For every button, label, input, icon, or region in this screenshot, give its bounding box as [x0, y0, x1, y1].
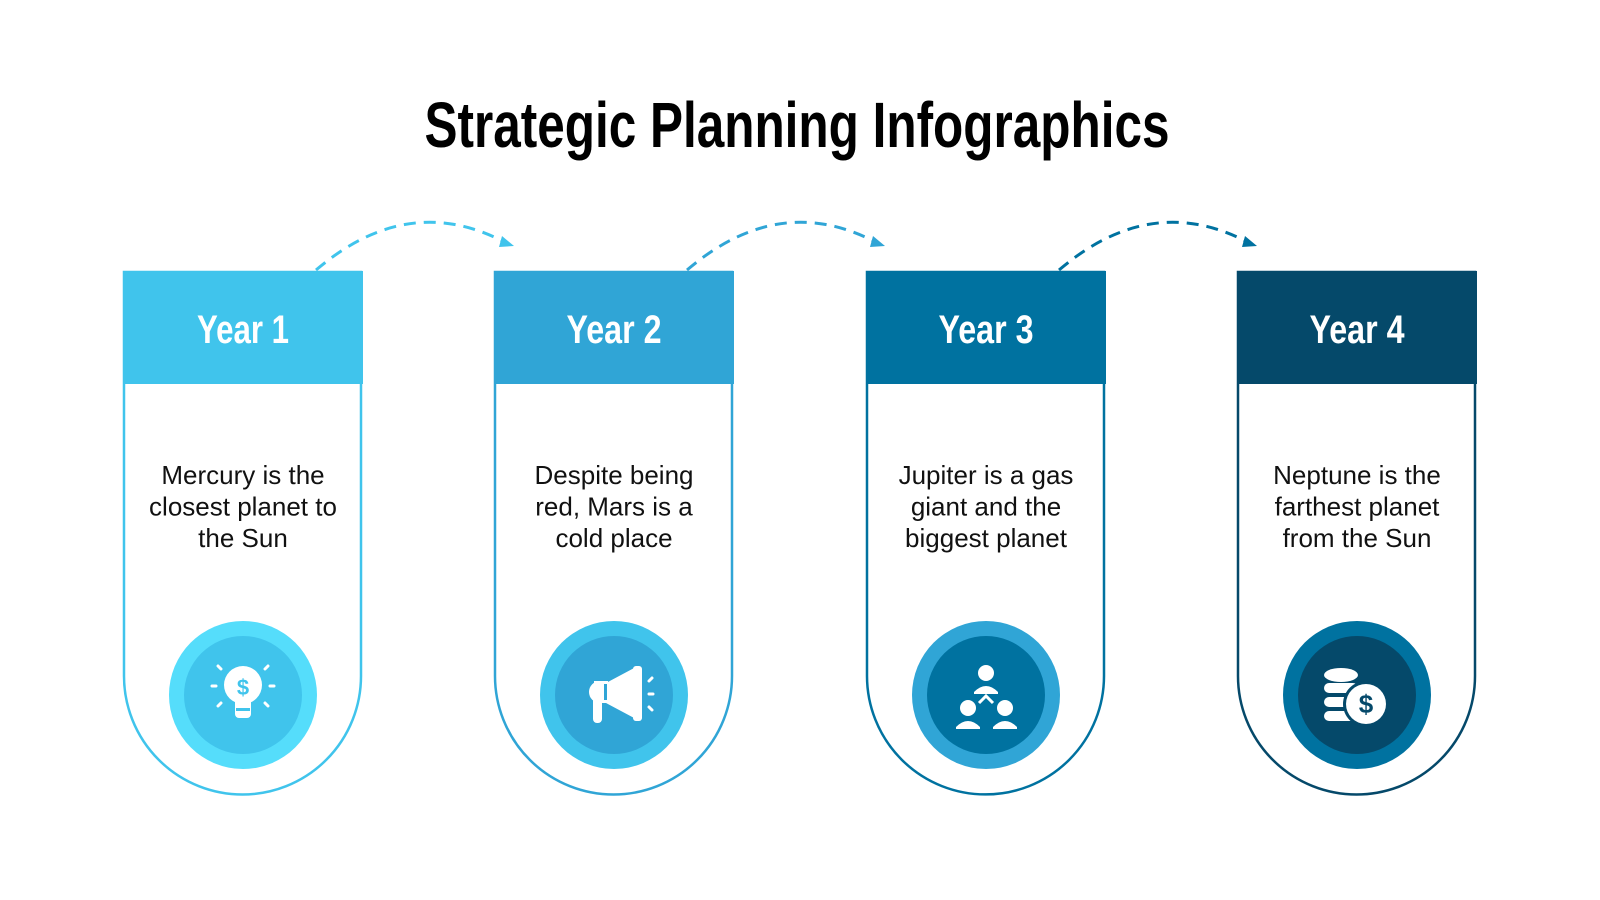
text: year 4: from the Sun [1283, 523, 1431, 553]
header: year 1 [123, 271, 363, 384]
header: year 2 [494, 271, 734, 384]
text: year 1: Mercury is the [161, 460, 325, 490]
panel: year 3 [866, 271, 1106, 794]
arrow: year2 to year3 [687, 222, 885, 270]
text: year 2: Despite being [534, 460, 694, 490]
panel: year 1 [123, 271, 363, 794]
text: year 4: farthest planet [1275, 492, 1440, 522]
text: year 3: giant and the [911, 492, 1061, 522]
icon: lightbulb dollar: $ [237, 675, 249, 700]
icon: team [912, 621, 1060, 769]
panel: year 4 [1237, 271, 1477, 794]
header: year 3 [866, 271, 1106, 384]
text: year 2: red, Mars is a [535, 492, 693, 522]
icon: coins dollar [1283, 621, 1431, 769]
panel: year 2 [494, 271, 734, 794]
title: Strategic Planning Infographics [424, 89, 1170, 161]
header: year 4: Year 4 [1310, 308, 1405, 352]
header: year 3: Year 3 [938, 308, 1034, 352]
icon: megaphone [540, 621, 688, 769]
text: year 3: biggest planet [905, 523, 1068, 553]
header: year 4 [1237, 271, 1477, 384]
header: year 2: Year 2 [566, 308, 662, 352]
header: year 1: Year 1 [197, 308, 289, 352]
icon: coins dollar: $ [1359, 689, 1374, 719]
text: year 1: the Sun [198, 523, 288, 553]
icon: lightbulb dollar [169, 621, 317, 769]
text: year 4: Neptune is the [1273, 460, 1441, 490]
arrow: year1 to year2 [316, 222, 514, 270]
arrow: year3 to year4 [1059, 222, 1257, 270]
text: year 1: closest planet to [149, 492, 337, 522]
text: year 2: cold place [555, 523, 673, 553]
text: year 3: Jupiter is a gas [899, 460, 1073, 490]
